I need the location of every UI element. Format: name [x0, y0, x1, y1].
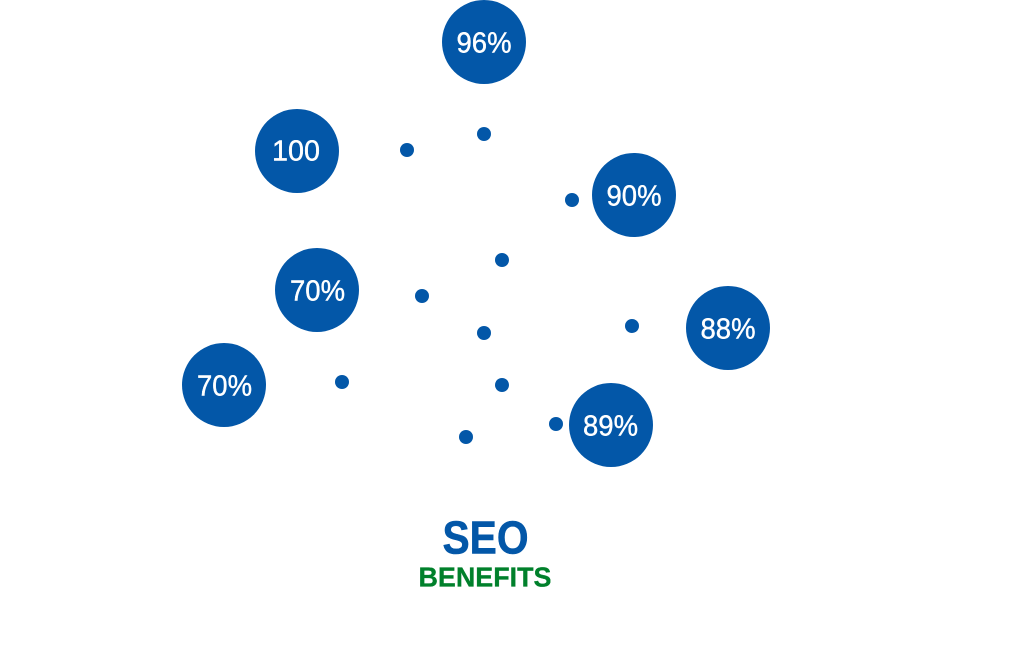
connector dots: [335, 127, 639, 444]
bubble: 90%: [592, 153, 676, 237]
bubble: 70% lower: [182, 343, 266, 427]
bubble: 90%: 90%: [606, 180, 662, 212]
subtitle: BENEFITS: BENEFITS: [418, 562, 552, 592]
bubble: 89%: 89%: [583, 410, 638, 442]
bubble: 96%: 96%: [456, 28, 512, 60]
bubble: 96%: [442, 0, 526, 84]
bubble: 88%: [686, 286, 770, 370]
bubble: 89%: [569, 383, 653, 467]
title: SEO: SEO: [442, 512, 528, 564]
bubble: 100: [255, 109, 339, 193]
bubble: 70% upper: 70%: [290, 276, 345, 308]
bubble: 70% upper: [275, 248, 359, 332]
bubble: 70% lower: 70%: [197, 370, 252, 402]
bubble: 88%: 88%: [700, 314, 756, 346]
bubble: 100: 100: [272, 136, 320, 168]
